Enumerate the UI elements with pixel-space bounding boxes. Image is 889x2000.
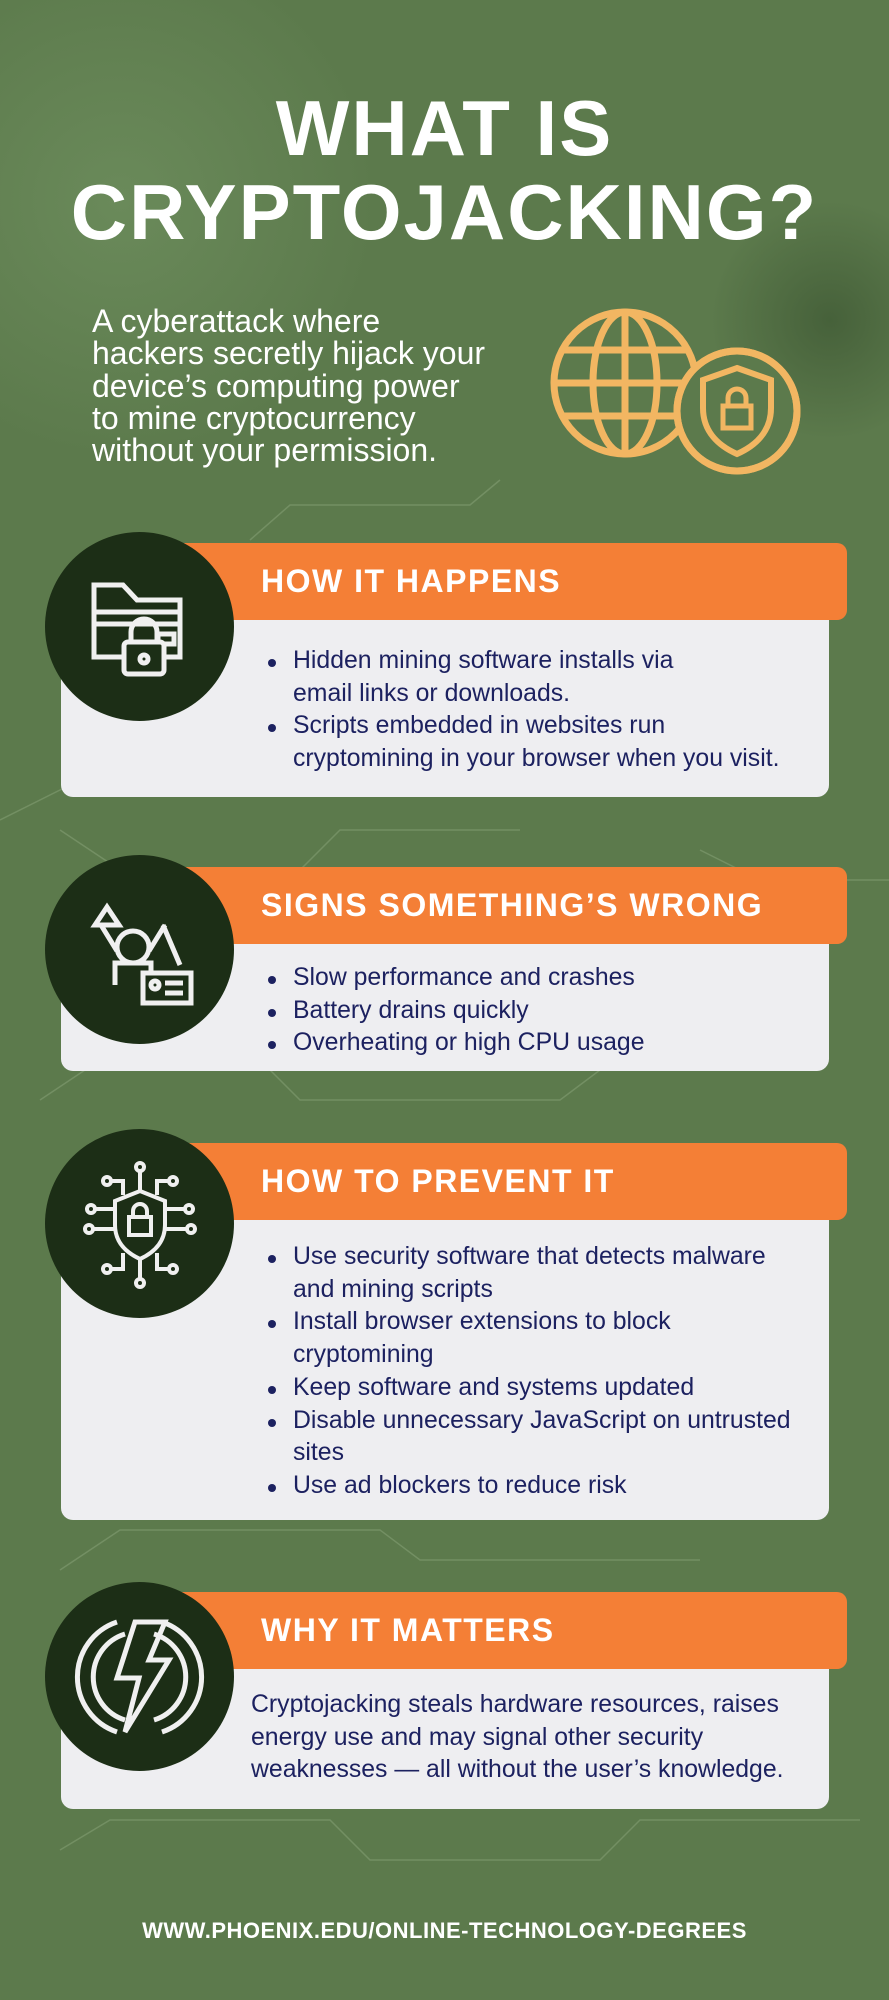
- bullets: cryptomining in your browser when you visit.: [293, 745, 780, 772]
- panel: how it happens: [45, 532, 847, 797]
- bullets: Install browser extensions to block cryptomining: [293, 1308, 671, 1368]
- heading: [179, 1143, 847, 1220]
- bullets: Keep software and systems updated: [293, 1374, 694, 1401]
- heading: HOW TO PREVENT IT: [261, 1163, 615, 1199]
- card body: [61, 1620, 829, 1809]
- icon: power bolt: [45, 1582, 234, 1771]
- heading: [179, 543, 847, 620]
- title: WHAT IS: [276, 84, 613, 172]
- panel: how to prevent it: [45, 1129, 847, 1520]
- bullets: [268, 1243, 791, 1499]
- title: [71, 84, 818, 256]
- heading: [179, 867, 847, 944]
- heading: SIGNS SOMETHING’S WRONG: [261, 887, 763, 923]
- card body: [61, 587, 829, 797]
- intro text: device’s computing power: [92, 368, 460, 404]
- card body: [61, 1174, 829, 1520]
- bullets: Slow performance and crashes: [293, 964, 635, 991]
- bullets: Disable unnecessary JavaScript on untrusted sites: [293, 1407, 791, 1466]
- intro text: hackers secretly hijack your: [92, 335, 485, 371]
- heading: HOW IT HAPPENS: [261, 563, 561, 599]
- bullets: Overheating or high CPU usage: [293, 1029, 644, 1056]
- bullets: Scripts embedded in websites run: [293, 712, 665, 739]
- intro text: without your permission.: [92, 432, 437, 468]
- card body: [61, 905, 829, 1071]
- icon: globe with shield: [550, 308, 800, 474]
- intro text: [92, 303, 485, 468]
- bullets: Use ad blockers to reduce risk: [293, 1472, 627, 1499]
- bullets: [268, 964, 644, 1056]
- bullets: [268, 647, 780, 772]
- icon: folder lock: [45, 532, 234, 721]
- bullets: Battery drains quickly: [293, 997, 529, 1024]
- footer url: WWW.PHOENIX.EDU/ONLINE-TECHNOLOGY-DEGREES: [142, 1918, 747, 1943]
- bullets: Hidden mining software installs via: [293, 647, 673, 674]
- heading: WHY IT MATTERS: [261, 1612, 555, 1648]
- panel: why it matters: [45, 1582, 847, 1809]
- intro text: to mine cryptocurrency: [92, 400, 416, 436]
- icon: hacker alert: [45, 855, 234, 1044]
- title: CRYPTOJACKING?: [71, 168, 818, 256]
- paragraph: Cryptojacking steals hardware resources, raises energy use and may signal other security weaknesses — all without the user’s knowledge.: [251, 1691, 784, 1783]
- icon: circuit shield: [45, 1129, 234, 1318]
- intro text: A cyberattack where: [92, 303, 380, 339]
- heading: [179, 1592, 847, 1669]
- panel: signs something's wrong: [45, 855, 847, 1071]
- bullets: email links or downloads.: [293, 680, 570, 707]
- bullets: Use security software that detects malware and mining scripts: [293, 1243, 766, 1303]
